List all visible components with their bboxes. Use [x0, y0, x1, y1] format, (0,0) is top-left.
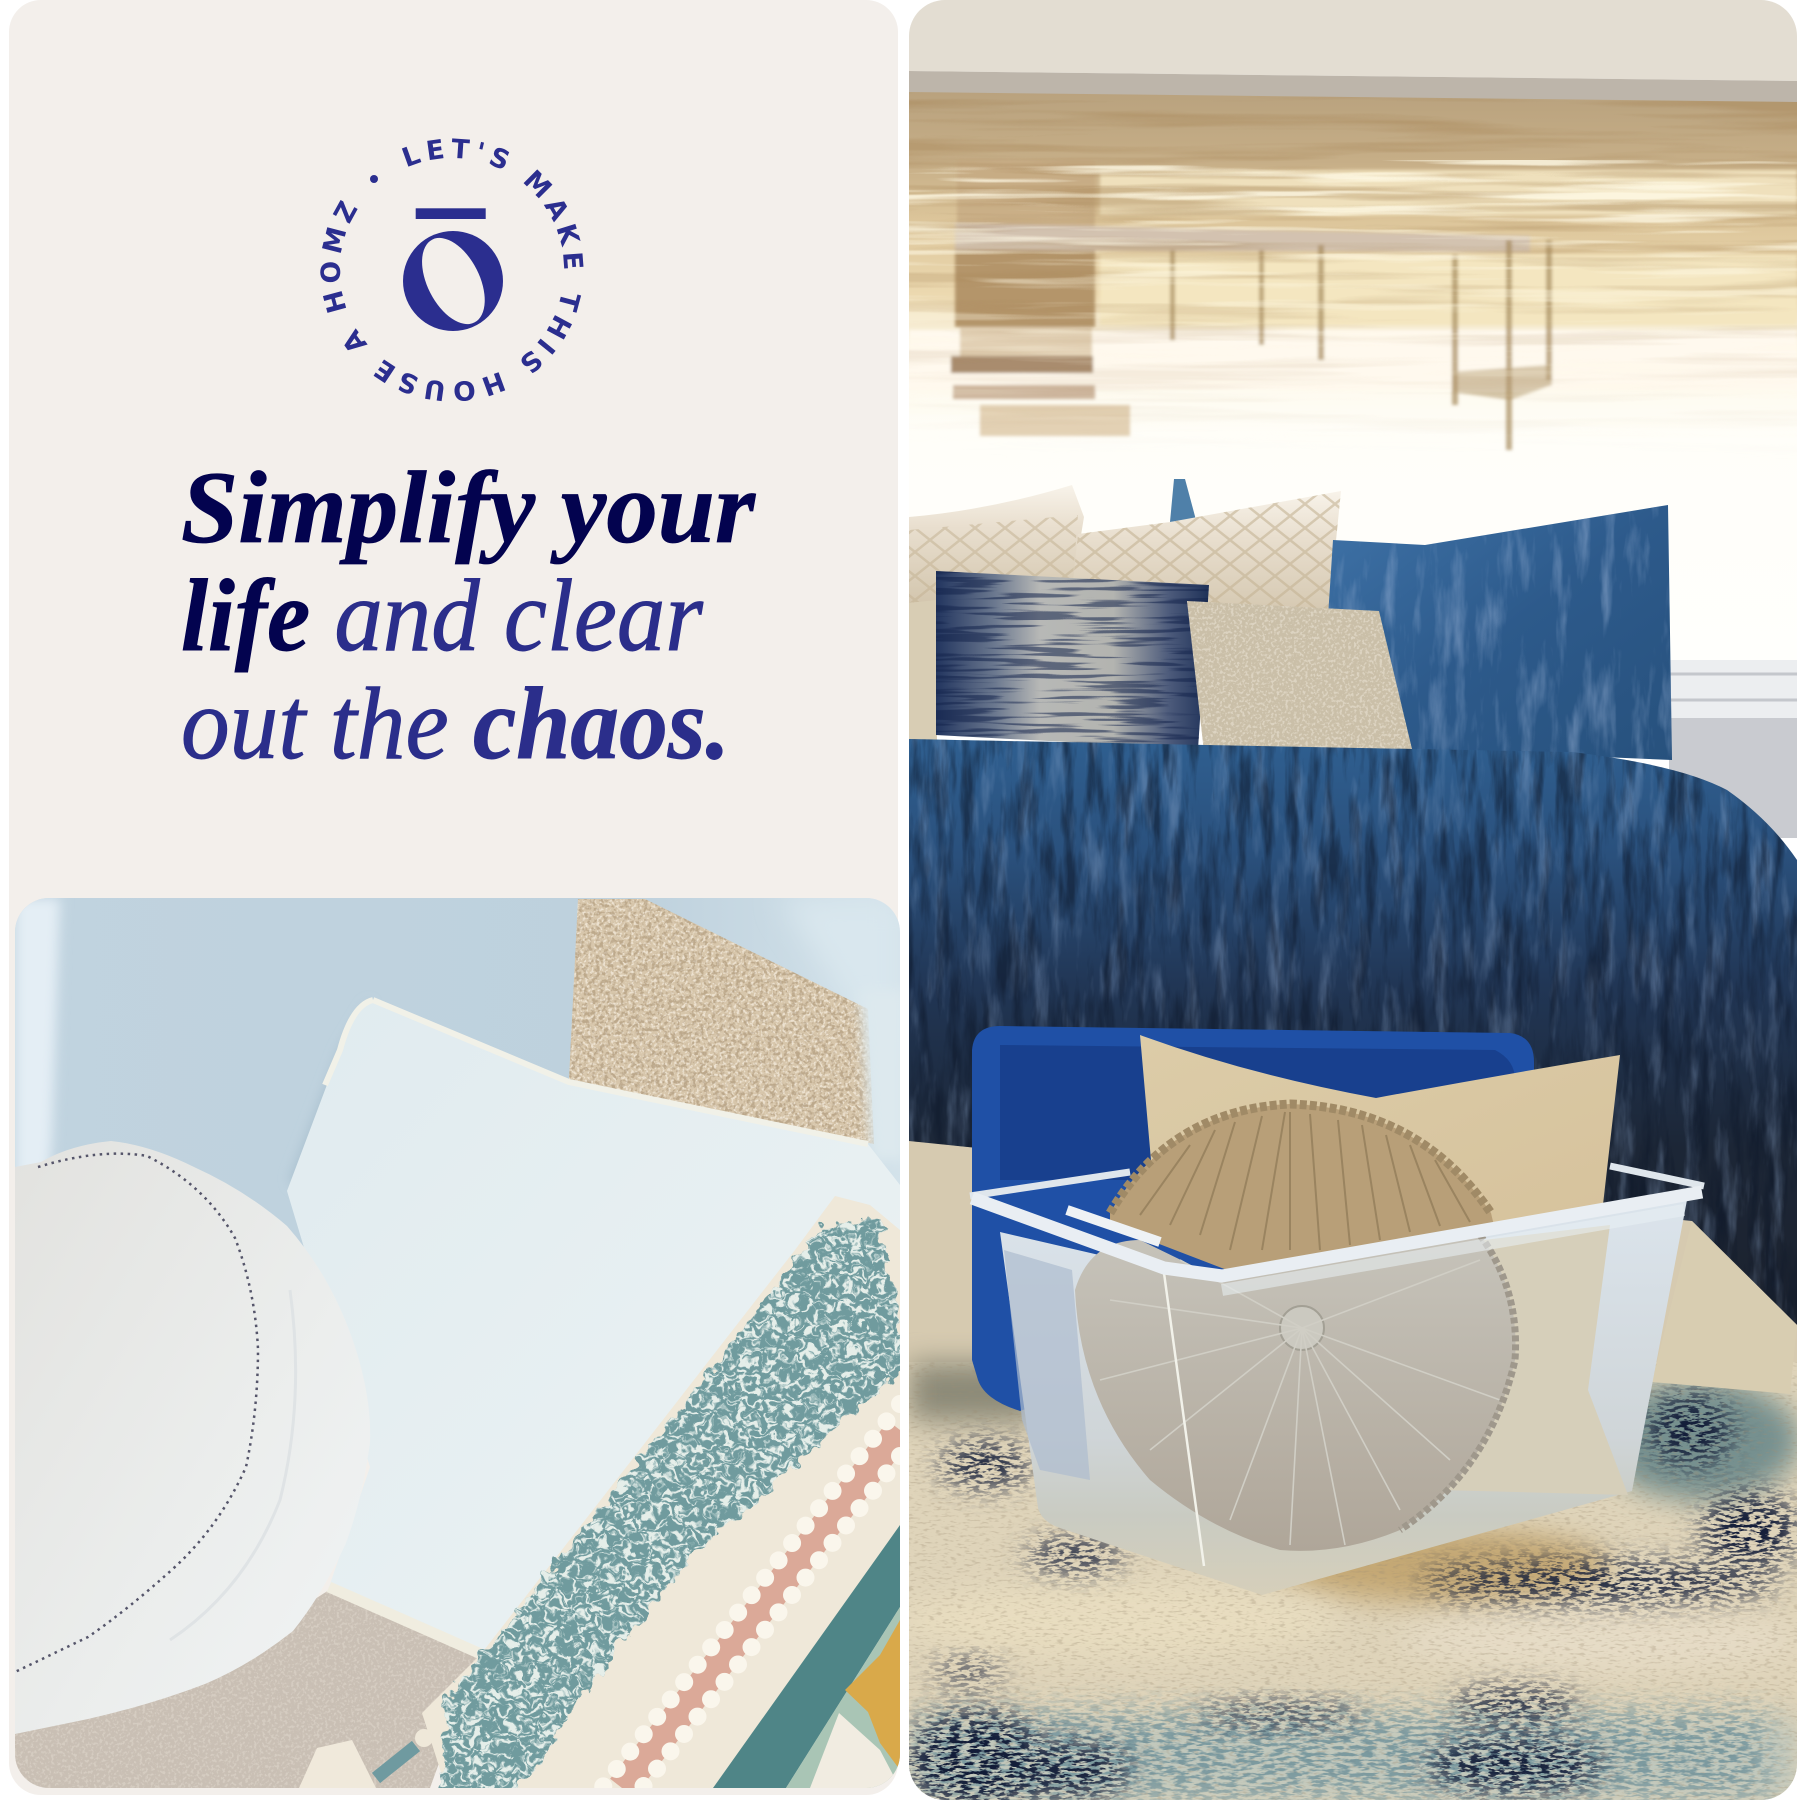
- boho cushion: [299, 1196, 905, 1795]
- window blinds: [909, 92, 1797, 672]
- striped cushion: [936, 571, 1209, 749]
- window sill: [1669, 660, 1797, 720]
- tassel: [299, 1729, 433, 1788]
- round cushion top: [1110, 1104, 1495, 1275]
- knit cushion: [569, 899, 905, 1160]
- blue lid through box: [1004, 1250, 1090, 1480]
- yellow tuft: [845, 1620, 900, 1770]
- logo dot: [370, 175, 378, 183]
- panel: cream text panel: [9, 0, 898, 1795]
- ceiling: [909, 0, 1797, 81]
- blue velvet cushion: [1328, 505, 1672, 760]
- heading line 3: out the chaos.: [181, 667, 730, 781]
- blue lid: [972, 1026, 1534, 1411]
- white cushion: [287, 1000, 900, 1654]
- fringe: [440, 1220, 905, 1795]
- logo letter o: [403, 228, 503, 334]
- round cushion through box: [1075, 1235, 1516, 1551]
- green stripe: [786, 1607, 900, 1788]
- teal stripe: [713, 1525, 900, 1788]
- logo: circular Homz badge: [320, 138, 584, 402]
- photo: pillows on sofa: [15, 898, 905, 1795]
- photo: bedroom with storage box: [900, 0, 1800, 1800]
- bed skirt front right: [1652, 1221, 1797, 1394]
- wall fabric: [15, 898, 900, 1400]
- salmon stitch band: [622, 1430, 900, 1788]
- lower wall: [1669, 718, 1797, 838]
- rug: [900, 1362, 1800, 1800]
- cream tuft: [810, 1713, 900, 1788]
- patterned cushion left: [909, 485, 1084, 603]
- heading line 1: Simplify your: [181, 451, 756, 565]
- blue vase: [1170, 479, 1196, 522]
- logo macron bar: [416, 208, 486, 219]
- velvet duvet: [909, 739, 1797, 1325]
- bed skirt back: [909, 1100, 1797, 1370]
- heading line 2: life and clear: [181, 559, 704, 673]
- rim: [970, 1166, 1704, 1290]
- front edge: [1164, 1273, 1204, 1566]
- carpet: [15, 1590, 480, 1788]
- cushion base: [422, 1196, 900, 1788]
- beige cushion behind: [909, 600, 937, 745]
- storage box: [970, 1166, 1704, 1595]
- patterned cushion right: [1072, 491, 1341, 620]
- fascia: [909, 71, 1797, 102]
- logo ring text: LET'S MAKE THIS HOUSE A HOMZ: [320, 138, 584, 402]
- round pouf: [15, 1141, 370, 1734]
- bead rows: [602, 1404, 900, 1788]
- small beige cushion: [1187, 601, 1412, 752]
- gold cushion: [1140, 1035, 1620, 1240]
- box body: [1000, 1200, 1687, 1595]
- heading: [181, 451, 756, 781]
- gold cushion through box: [1400, 1225, 1628, 1495]
